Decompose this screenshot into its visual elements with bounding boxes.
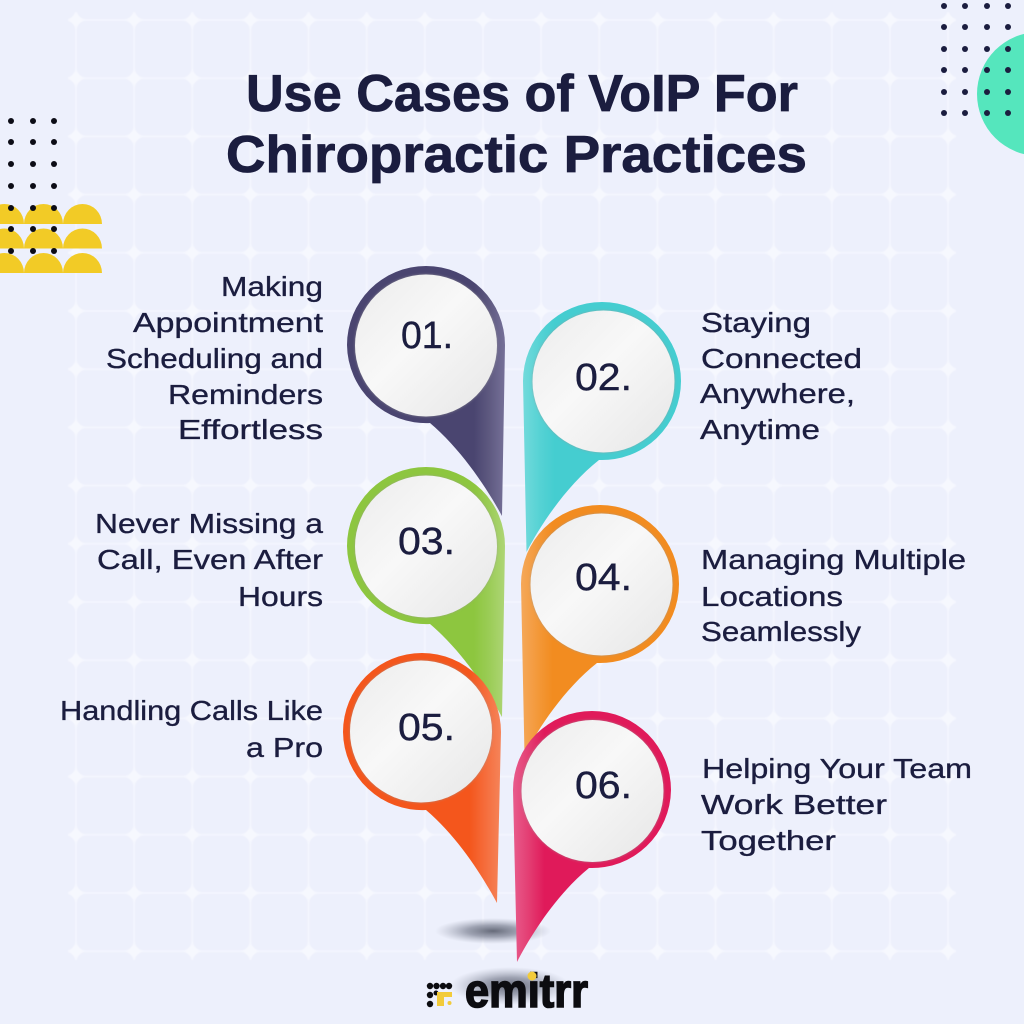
pin 06: 06.	[575, 765, 632, 807]
text: item 03: Hours	[238, 581, 323, 612]
text: item 04: Locations	[701, 581, 843, 612]
text: item 04: Managing Multiple	[701, 544, 966, 575]
pin 01	[347, 266, 505, 516]
pin 06	[513, 711, 671, 962]
pin 01: 01.	[401, 315, 453, 357]
text: item 01: Appointment	[133, 307, 323, 338]
title: Use Cases of VoIP For	[246, 65, 798, 123]
text: item 04	[701, 544, 966, 647]
text: item 06: Work Better	[701, 789, 887, 820]
ground shadow: pin 06	[450, 967, 570, 1005]
text: item 02: Anywhere,	[700, 378, 855, 409]
decoration: green circle	[977, 32, 1024, 156]
text: item 01: Scheduling and	[106, 343, 323, 374]
pin 03	[347, 467, 505, 717]
pin 04	[521, 505, 679, 755]
pin 05: 05.	[398, 707, 455, 749]
text: item 03: Never Missing a	[95, 508, 324, 539]
text: item 04: Seamlessly	[701, 616, 861, 647]
text: item 01: Reminders	[168, 379, 323, 410]
text: item 06: Together	[701, 825, 836, 856]
text: item 05: Handling Calls Like	[60, 695, 323, 726]
text: item 02: Connected	[701, 343, 862, 374]
text: item 05	[60, 695, 323, 763]
pin 03: 03.	[398, 521, 455, 563]
text: item 01: Making	[221, 271, 323, 302]
pin 05	[343, 653, 501, 903]
decoration: yellow semicircles	[0, 204, 102, 273]
text: item 03: Call, Even After	[97, 544, 323, 575]
logo: emitrr: emitrr	[465, 964, 588, 1017]
pin 02	[523, 302, 681, 552]
title	[226, 65, 807, 184]
text: item 01: Effortless	[178, 414, 323, 445]
ground shadow: pin 05	[435, 918, 551, 944]
text: item 03	[95, 508, 324, 612]
text: item 06: Helping Your Team	[702, 753, 972, 784]
decoration: top right dots	[941, 3, 1011, 116]
text: item 02: Anytime	[700, 414, 820, 445]
text: item 02: Staying	[701, 307, 811, 338]
text: item 02	[700, 307, 862, 445]
title: Chiropractic Practices	[226, 126, 807, 184]
decoration: top left dots	[8, 118, 57, 254]
text: item 05: a Pro	[246, 732, 323, 763]
pin 04: 04.	[575, 557, 632, 599]
pin 02: 02.	[575, 357, 632, 399]
text: item 01	[106, 271, 323, 445]
text: item 06	[701, 753, 972, 856]
